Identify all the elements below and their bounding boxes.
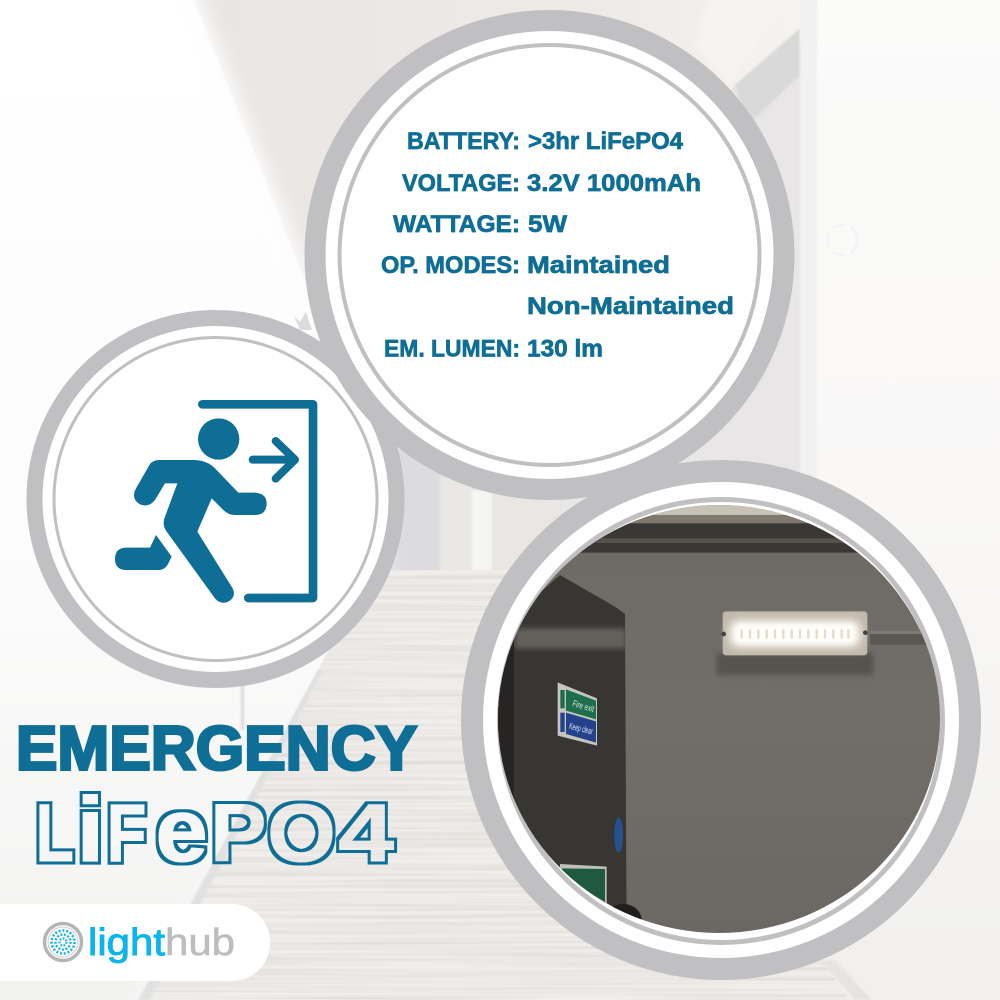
icon: lighthub logo	[44, 924, 82, 960]
light fitting	[721, 611, 868, 655]
spec: wattage: WATTAGE:	[393, 211, 520, 238]
title: LiFePO4 outlined: F	[107, 788, 146, 879]
back leg	[115, 535, 172, 570]
title: LiFePO4 outlined: O	[267, 788, 336, 879]
spec: battery: >3hr LiFePO4	[528, 128, 684, 155]
fire exit sign: Keep clear	[568, 721, 594, 736]
dark cabinet	[498, 575, 626, 914]
panel: specification circle	[304, 10, 794, 500]
blue round sign	[614, 817, 623, 853]
ceiling beam	[735, 28, 800, 125]
green sign lower	[560, 864, 607, 904]
icon: person running to exit door	[115, 404, 313, 603]
far corridor end wall	[385, 450, 560, 590]
plant tips	[294, 312, 312, 330]
spec: operating modes: Non-Maintained	[527, 293, 734, 320]
fire exit sign: Fire exit	[571, 698, 596, 714]
body	[134, 460, 267, 603]
spec: operating modes: Maintained	[527, 252, 670, 279]
title: LiFePO4 outlined: 4	[338, 788, 395, 879]
photo wall	[493, 500, 947, 940]
spec: emergency lumen: EM. LUMEN:	[384, 336, 520, 362]
wall fixture	[827, 225, 857, 255]
title: LiFePO4 outlined: e	[155, 781, 208, 881]
ceiling	[652, 505, 786, 516]
spec: emergency lumen	[384, 336, 603, 362]
door frame	[202, 404, 313, 598]
conduit	[870, 630, 926, 645]
spec: voltage: 3.2V 1000mAh	[527, 170, 701, 197]
spec: battery	[407, 128, 684, 155]
left wall	[0, 0, 385, 1000]
spec: emergency lumen: 130 lm	[527, 336, 603, 362]
spec: wattage: 5W	[528, 211, 567, 238]
spec: voltage	[402, 170, 701, 197]
spec: voltage: VOLTAGE:	[402, 170, 520, 197]
panel: exit icon circle	[26, 310, 404, 688]
head	[198, 418, 239, 460]
dark object	[613, 904, 642, 920]
title: LiFePO4 outlined: i	[76, 779, 105, 881]
floor carpet	[150, 570, 850, 1000]
ceiling	[190, 0, 810, 580]
spec: operating modes	[381, 252, 734, 320]
arrow	[253, 441, 295, 479]
title: EMERGENCY: EMERGENCY	[16, 714, 417, 784]
logo wordmark: lighthub	[88, 922, 235, 964]
light shadow	[717, 653, 873, 675]
right corridor wall	[540, 40, 870, 1000]
logo pill	[0, 904, 270, 981]
spec: operating modes: OP. MODES:	[381, 252, 520, 279]
title: LiFePO4 outlined: L	[36, 788, 74, 879]
photo: emergency light on wall	[493, 500, 947, 940]
right wall	[816, 0, 1000, 1000]
skirting lines	[138, 670, 872, 1000]
spec: battery: BATTERY:	[407, 128, 520, 155]
fire exit sign	[558, 682, 597, 746]
title: LiFePO4 outlined: P	[210, 788, 266, 879]
dark trunking	[580, 523, 858, 553]
panel: product photo circle	[461, 460, 981, 980]
